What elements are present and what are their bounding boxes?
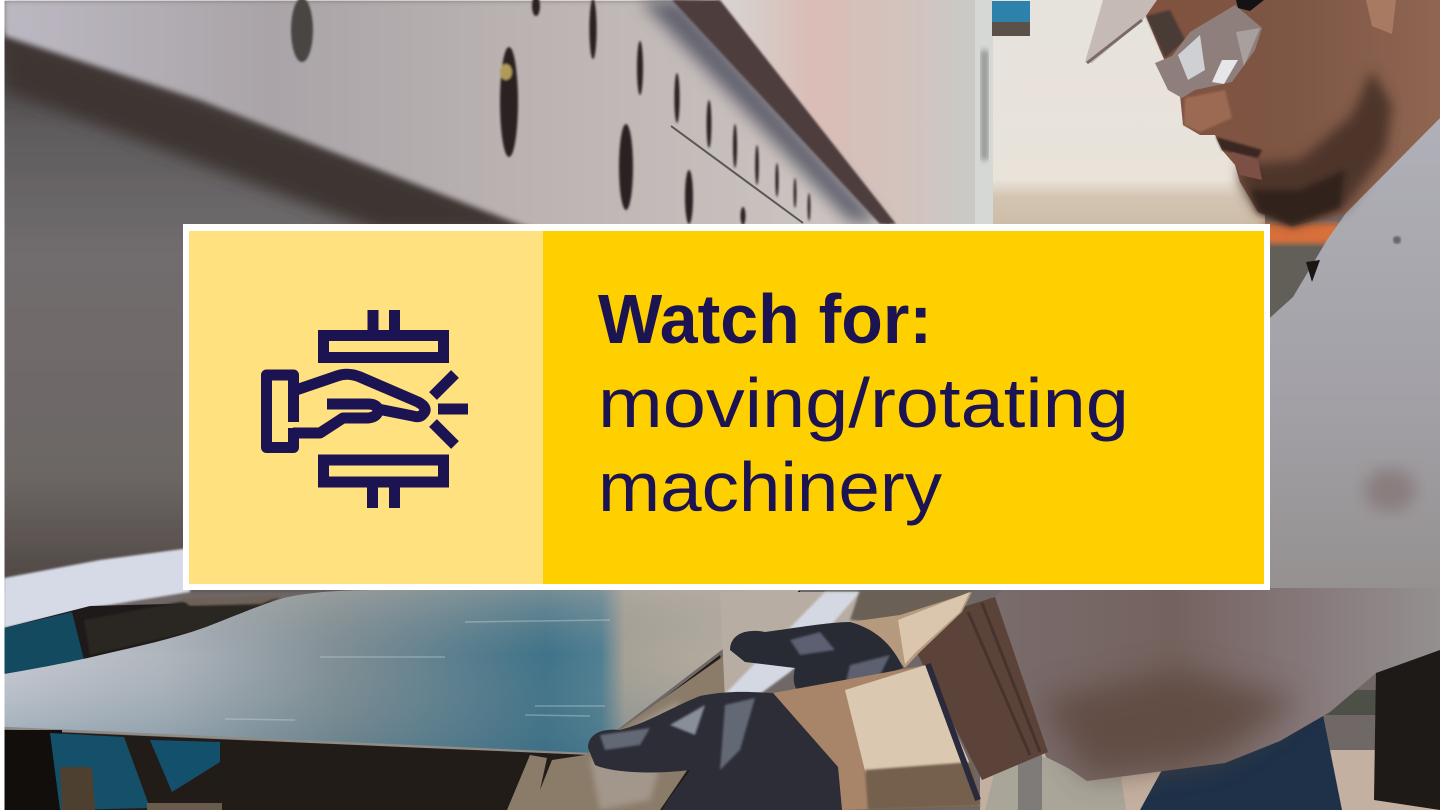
text: machinery: machinery bbox=[598, 448, 942, 526]
lower glove cuff bbox=[773, 664, 980, 810]
white page edge at left bbox=[0, 0, 4, 810]
press brake lower dark face bbox=[0, 30, 700, 590]
machine base under the sheet bbox=[4, 655, 760, 810]
press brake upper metal plate bbox=[4, 0, 900, 240]
dark shadow band under the plate bbox=[4, 36, 560, 232]
upper glove bbox=[730, 622, 903, 696]
heading: Watch for: Watch for: bbox=[598, 280, 932, 358]
icon: hand caught between press plates with impact lines bbox=[266, 310, 468, 508]
punched holes in the plate bbox=[291, 0, 810, 225]
beam shadow smear bbox=[640, 0, 880, 222]
safety glasses bbox=[1155, 0, 1264, 98]
dark machinery behind the sheet bbox=[4, 588, 800, 680]
folding die teeth bbox=[507, 655, 735, 810]
scribed line on the plate bbox=[671, 126, 803, 223]
white reflective strip at left bbox=[4, 548, 190, 628]
callout banner with white border bbox=[183, 224, 1270, 590]
floor and legs, lower right bbox=[980, 645, 1440, 810]
icon: impact lines bbox=[433, 374, 468, 445]
icon: hand with cuff bbox=[266, 374, 425, 448]
text panel: bright yellow bbox=[543, 231, 1264, 584]
upper glove cuff bbox=[850, 592, 972, 668]
sleeve bbox=[995, 588, 1440, 781]
lower glove bbox=[588, 692, 842, 810]
icon: top press plate bbox=[324, 310, 444, 358]
dark diagonal beam bbox=[672, 0, 896, 224]
sleeve ribbed cuff bbox=[917, 597, 1048, 780]
metal sheet bbox=[4, 590, 800, 754]
icon panel: pale yellow bbox=[189, 231, 543, 584]
pale background behind upper hand bbox=[720, 590, 975, 705]
grey work shirt bbox=[1262, 118, 1440, 600]
icon: bottom press plate bbox=[324, 460, 444, 508]
pink-grey side panel of the press bbox=[715, 0, 992, 224]
worker face bbox=[1146, 0, 1440, 226]
hard hat brim bbox=[1085, 0, 1157, 63]
blue patch and pale wall in background bbox=[975, 0, 1440, 334]
text: moving/rotating: moving/rotating bbox=[598, 364, 1129, 442]
